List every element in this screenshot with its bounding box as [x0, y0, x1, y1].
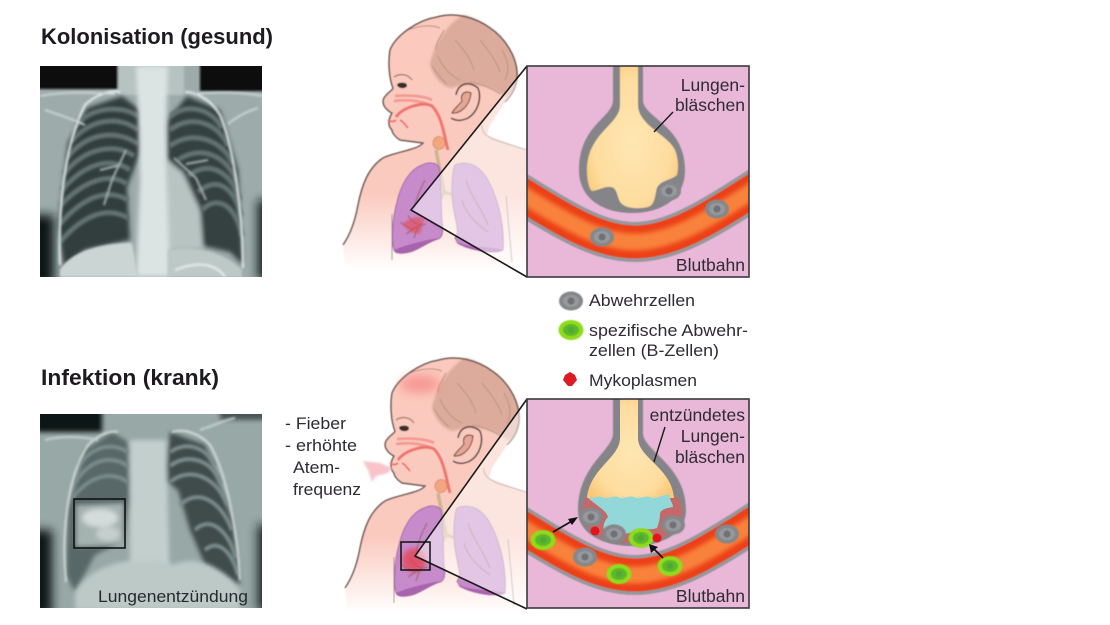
panel: healthy alveolus: bläschen	[675, 95, 745, 115]
arrow: cell migration right	[649, 544, 663, 558]
breath plume	[363, 461, 392, 482]
legend: Mykoplasmen: Mykoplasmen	[589, 371, 697, 390]
arrow: cell migration left	[553, 517, 578, 532]
heading: Infektion (krank): Infektion (krank)	[41, 365, 219, 390]
leader line	[654, 112, 673, 132]
panel: healthy alveolus	[526, 65, 750, 278]
symptoms list: - erhöhte	[285, 436, 357, 455]
legend: spezifische Abwehrzellen	[558, 320, 748, 360]
legend	[558, 291, 748, 390]
illustration: healthy child with lungs	[343, 15, 527, 277]
legend: Abwehrzellen: Abwehrzellen	[589, 291, 695, 310]
legend: spezifische Abwehrzellen: spezifische Abwehr-	[589, 321, 748, 340]
x-ray: infected chest	[40, 414, 262, 608]
zoom triangle	[411, 66, 527, 277]
leader line	[654, 427, 665, 462]
symptoms list: frequenz	[293, 480, 361, 499]
zoom triangle	[415, 399, 527, 609]
panel: inflamed alveolus: Lungen-	[681, 426, 745, 446]
inflamed lung area	[402, 548, 426, 572]
label: entzündetes Lungenbläschen: entzündetes	[650, 405, 745, 425]
alveolus	[579, 60, 685, 213]
blood vessel	[515, 519, 760, 575]
heading: Kolonisation (gesund): Kolonisation (gesund)	[41, 24, 273, 49]
label: Lungenbläschen: Lungen-	[681, 75, 745, 95]
symptoms list	[285, 414, 361, 499]
x-ray: healthy chest	[40, 66, 262, 277]
fever glow on forehead	[400, 375, 440, 393]
panel: inflamed alveolus	[526, 398, 750, 609]
label: Blutbahn: Blutbahn	[676, 255, 745, 275]
callout box on lung	[401, 542, 430, 570]
legend: spezifische Abwehrzellen: zellen (B-Zellen)	[589, 341, 719, 360]
symptoms list: Atem-	[293, 458, 340, 477]
callout box on x-ray	[74, 499, 125, 548]
blood vessel	[515, 186, 760, 242]
symptoms list: - Fieber	[285, 414, 346, 433]
panel: inflamed alveolus: bläschen	[675, 447, 745, 467]
illustration: sick child with lungs	[345, 358, 529, 613]
alveolus	[578, 393, 686, 548]
label: Blutbahn: Blutbahn	[676, 586, 745, 606]
x-ray caption: Lungenentzündung: Lungenentzündung	[98, 587, 248, 606]
